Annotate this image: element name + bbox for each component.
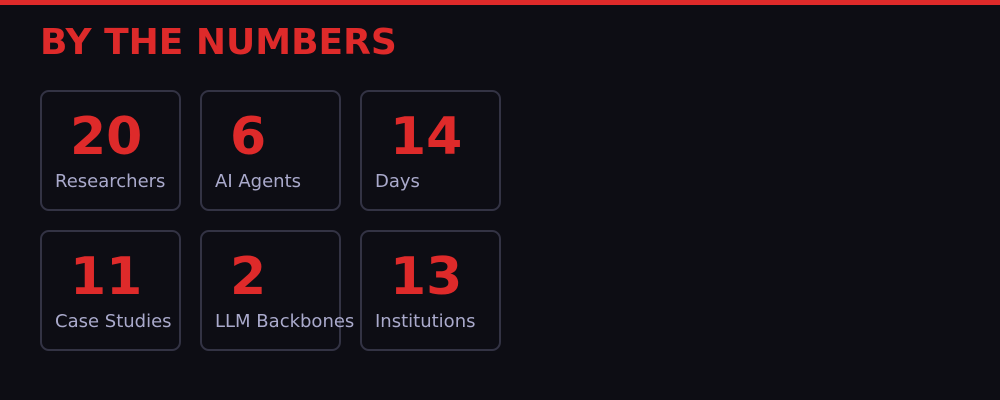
title: BY THE NUMBERS: [40, 22, 397, 63]
stat card: days: 14: [390, 107, 462, 167]
stat card: days: [361, 91, 500, 210]
stat card: AI agents: [201, 91, 340, 210]
stat card: days: Days: [375, 171, 420, 192]
stat card: case studies: [41, 231, 180, 350]
stat card: researchers: Researchers: [55, 171, 165, 192]
stat card: researchers: 20: [70, 107, 142, 167]
stat card: LLM backbones: 2: [230, 247, 266, 307]
stat card: institutions: [361, 231, 500, 350]
stat card: AI agents: 6: [230, 107, 266, 167]
stat card: case studies: 11: [70, 247, 142, 307]
stat card: case studies: Case Studies: [55, 311, 172, 332]
stat card: LLM backbones: [201, 231, 354, 350]
stat card: institutions: 13: [390, 247, 462, 307]
stat card: LLM backbones: LLM Backbones: [215, 311, 354, 332]
stat card: institutions: Institutions: [375, 311, 475, 332]
stat card: AI agents: AI Agents: [215, 171, 301, 192]
top accent bar: [0, 0, 1000, 5]
stat card: researchers: [41, 91, 180, 210]
